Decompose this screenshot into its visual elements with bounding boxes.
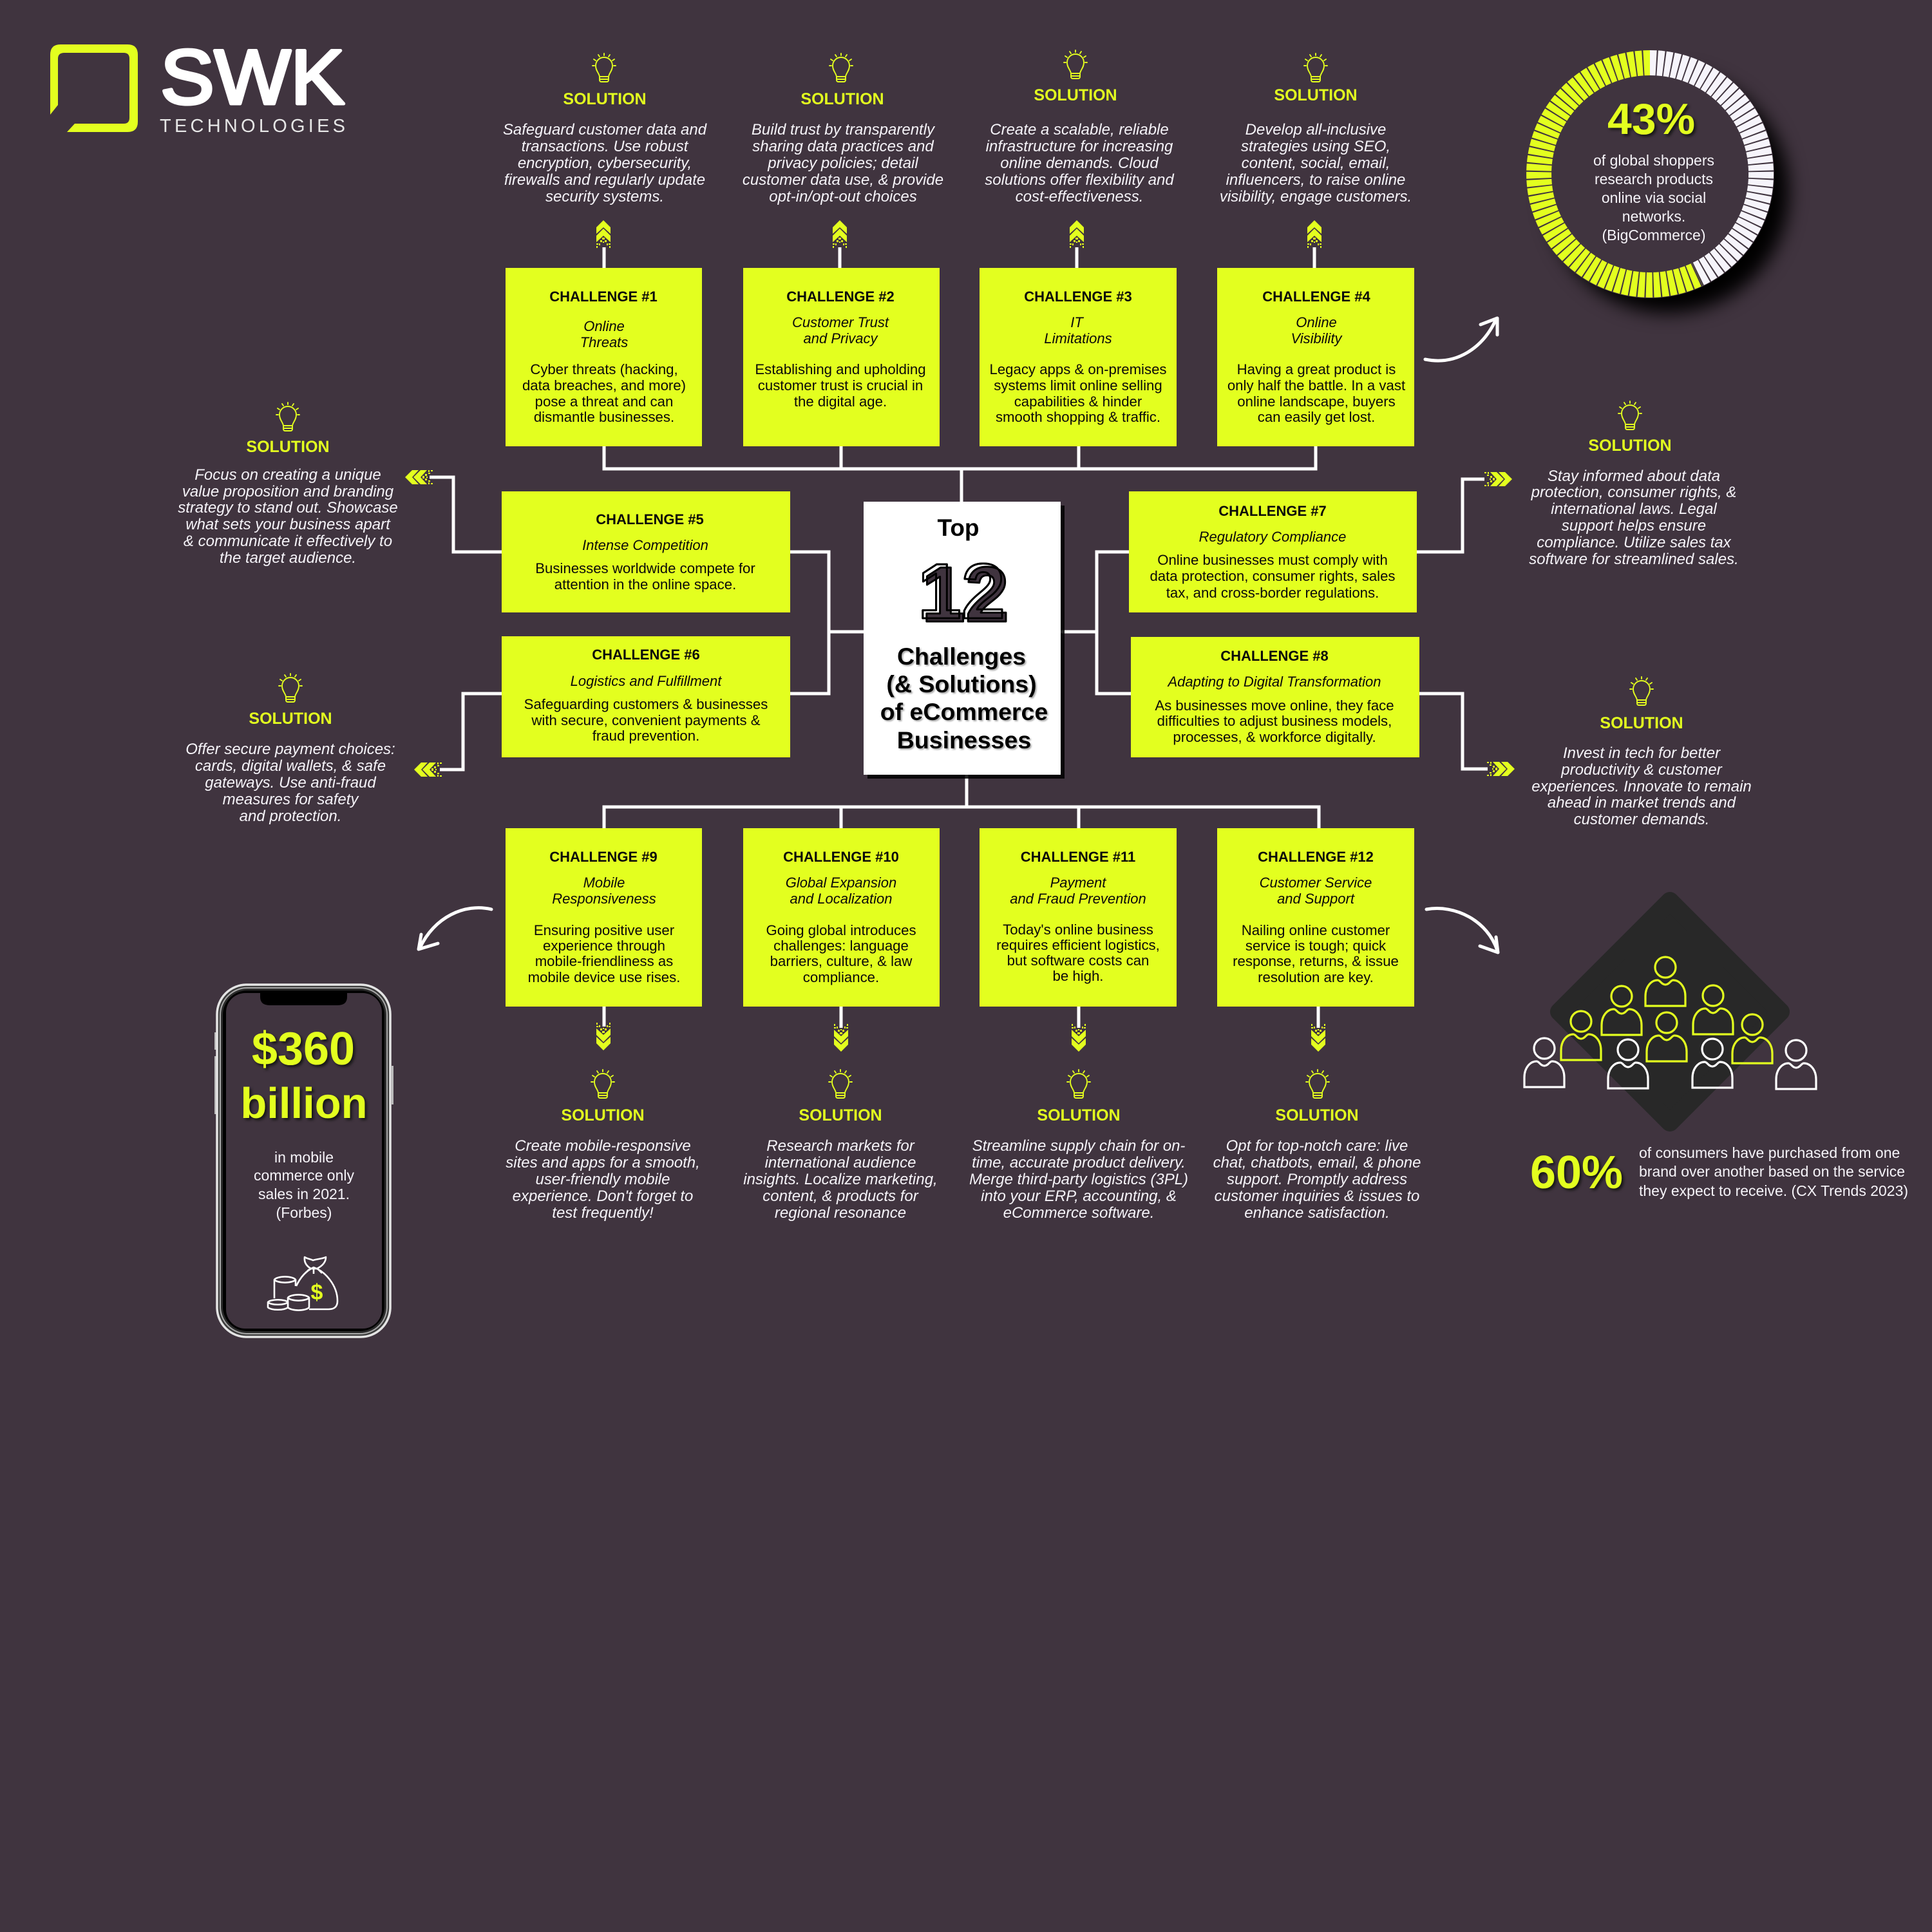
phone notch <box>260 993 347 1005</box>
donut white segments <box>1650 62 1761 274</box>
stat: people illustration <box>1524 901 1816 1122</box>
arrow: chevrons down 9 <box>596 1023 611 1050</box>
panel: challenge 9 <box>506 828 702 1007</box>
icon: light bulb <box>1304 53 1327 82</box>
challenge topic: Online <box>1296 314 1337 330</box>
panel: challenge 4 <box>1217 268 1414 446</box>
arrow: curved to people <box>1426 909 1498 952</box>
challenge description: fraud prevention. <box>592 728 699 744</box>
challenge description: data protection, consumer rights, sales <box>1150 568 1396 584</box>
solution text: protection, consumer rights, & <box>1531 484 1736 501</box>
solution text: regional resonance <box>775 1204 906 1222</box>
challenge description: customer trust is crucial in <box>758 377 923 393</box>
challenge description: Today's online business <box>1003 922 1153 938</box>
panel: challenge 8 <box>1131 637 1419 757</box>
panel: challenge 2 <box>743 268 940 446</box>
challenge topic: Intense Competition <box>582 537 708 553</box>
solution text: value proposition and branding <box>182 483 394 500</box>
solution text: software for streamlined sales. <box>1529 551 1739 568</box>
solution heading: SOLUTION <box>563 90 647 108</box>
phone side buttons <box>214 1032 393 1114</box>
challenge topic: Adapting to Digital Transformation <box>1167 674 1381 690</box>
challenge description: be high. <box>1053 968 1103 984</box>
solution text: experiences. Innovate to remain <box>1531 778 1752 795</box>
challenge heading: CHALLENGE #7 <box>1218 503 1327 519</box>
challenge description: data breaches, and more) <box>522 377 686 393</box>
solution text: sites and apps for a smooth, <box>506 1154 700 1171</box>
challenge description: processes, & workforce digitally. <box>1173 729 1376 745</box>
logo wordmark: SWK <box>160 34 345 120</box>
solution heading: SOLUTION <box>1275 1106 1359 1124</box>
challenge description: barriers, culture, & law <box>770 953 913 969</box>
icon: light bulb <box>1306 1070 1329 1098</box>
solution text: security systems. <box>545 188 664 205</box>
stat number: 43% <box>1607 95 1695 144</box>
solution 1 <box>503 53 707 205</box>
icon: money bag and coins <box>268 1257 337 1311</box>
heading: challenges and solutions <box>880 643 1048 753</box>
solution text: content, social, email, <box>1242 155 1390 172</box>
solution text: Focus on creating a unique <box>194 466 381 484</box>
solution text: visibility, engage customers. <box>1220 188 1412 205</box>
challenge heading: CHALLENGE #3 <box>1024 289 1132 305</box>
challenge description: mobile device use rises. <box>528 969 680 985</box>
solution text: influencers, to raise online <box>1226 171 1405 189</box>
solution 7 <box>1529 401 1739 568</box>
stat description: online via social <box>1602 189 1706 206</box>
logo subtitle: TECHNOLOGIES <box>160 116 345 137</box>
challenge description: but software costs can <box>1007 952 1149 969</box>
challenge description: Online businesses must comply with <box>1157 552 1388 568</box>
solution text: user-friendly mobile <box>536 1171 670 1188</box>
challenge topic: Limitations <box>1044 330 1112 346</box>
stat description: of global shoppers <box>1593 152 1714 169</box>
phone screen <box>226 993 382 1329</box>
panel: challenge 10 <box>743 828 940 1007</box>
panel: challenge 11 <box>980 828 1177 1007</box>
white people <box>1524 1038 1816 1089</box>
solution text: into your ERP, accounting, & <box>981 1188 1177 1205</box>
arrow: chevrons up 3 <box>1070 220 1084 248</box>
panel: challenge 7 <box>1129 491 1417 612</box>
challenge description: compliance. <box>803 969 879 985</box>
challenge heading: CHALLENGE #12 <box>1258 849 1374 865</box>
stat: phone with $360 billion <box>214 985 393 1337</box>
stat description: (Forbes) <box>276 1204 332 1221</box>
solution text: Research markets for <box>766 1137 915 1155</box>
stat: 60% of consumers <box>1530 1144 1908 1199</box>
solution text: Safeguard customer data and <box>503 121 707 138</box>
solution text: transactions. Use robust <box>522 138 689 155</box>
solution 10 <box>743 1070 938 1222</box>
solution text: Streamline supply chain for on- <box>972 1137 1185 1155</box>
solution text: customer inquiries & issues to <box>1215 1188 1419 1205</box>
arrow: chevrons down 11 <box>1072 1024 1086 1052</box>
challenge description: systems limit online selling <box>994 377 1162 393</box>
challenge topic: and Privacy <box>804 330 878 346</box>
donut shadow <box>1547 71 1789 313</box>
solution text: productivity & customer <box>1560 761 1723 779</box>
solution text: privacy policies; detail <box>767 155 918 172</box>
solution heading: SOLUTION <box>1037 1106 1121 1124</box>
solution text: Build trust by transparently <box>752 121 936 138</box>
challenge description: capabilities & hinder <box>1014 393 1142 410</box>
panel: challenge 5 <box>502 491 790 612</box>
solution heading: SOLUTION <box>799 1106 882 1124</box>
connector lines <box>430 247 1488 1028</box>
dark diamond <box>1559 901 1781 1122</box>
solution text: Create mobile-responsive <box>515 1137 691 1155</box>
challenge heading: CHALLENGE #5 <box>596 511 704 527</box>
solution text: what sets your business apart <box>185 516 391 533</box>
challenge topic: Mobile <box>583 875 625 891</box>
icon: light bulb <box>592 53 616 82</box>
arrow: chevrons left 5 <box>405 470 433 484</box>
solution text: support helps ensure <box>1562 517 1706 535</box>
challenge heading: CHALLENGE #8 <box>1220 648 1329 664</box>
solution text: and protection. <box>240 808 341 825</box>
icon: light bulb <box>276 402 299 431</box>
challenge description: Cyber threats (hacking, <box>530 361 678 377</box>
icon: light bulb <box>1618 401 1642 430</box>
stat description: networks. <box>1622 208 1685 225</box>
challenge description: pose a threat and can <box>535 393 673 410</box>
solution text: customer demands. <box>1574 811 1709 828</box>
icon: light bulb <box>1067 1070 1090 1098</box>
challenge description: As businesses move online, they face <box>1155 697 1394 714</box>
solution heading: SOLUTION <box>1588 437 1672 455</box>
solution text: infrastructure for increasing <box>986 138 1173 155</box>
heading: challenges and solutions: (& Solutions) <box>886 670 1037 697</box>
challenge topic: Logistics and Fulfillment <box>571 673 722 689</box>
challenge description: service is tough; quick <box>1245 938 1387 954</box>
solution text: gateways. Use anti-fraud <box>205 774 376 791</box>
arrow: curved to phone <box>419 908 491 949</box>
challenge description: challenges: language <box>773 938 909 954</box>
arrow: chevrons up 4 <box>1307 220 1321 248</box>
challenge heading: CHALLENGE #6 <box>592 647 700 663</box>
challenge heading: CHALLENGE #2 <box>786 289 895 305</box>
heading: challenges and solutions: Businesses <box>897 726 1031 753</box>
challenge description: Ensuring positive user <box>534 922 675 938</box>
stat description: (BigCommerce) <box>1602 227 1706 243</box>
stat number: billion <box>240 1079 368 1128</box>
solution text: support. Promptly address <box>1227 1171 1407 1188</box>
solution 4 <box>1220 53 1412 205</box>
challenge description: mobile-friendliness as <box>535 953 673 969</box>
stat number <box>240 1023 368 1128</box>
challenge description: the digital age. <box>794 393 887 410</box>
challenge description: resolution are key. <box>1258 969 1374 985</box>
challenge topic: Payment <box>1050 875 1106 891</box>
solution heading: SOLUTION <box>561 1106 645 1124</box>
stat description: of consumers have purchased from one <box>1639 1144 1900 1161</box>
challenge description: Legacy apps & on-premises <box>989 361 1167 377</box>
challenge topic: and Fraud Prevention <box>1010 891 1146 907</box>
challenge description: Nailing online customer <box>1242 922 1390 938</box>
big number 12: 12 <box>922 551 1009 638</box>
icon: light bulb <box>591 1070 614 1098</box>
arrow: curved to donut <box>1425 318 1497 361</box>
solution text: Invest in tech for better <box>1563 744 1721 762</box>
solution heading: SOLUTION <box>800 90 884 108</box>
challenge description: with secure, convenient payments & <box>531 712 761 728</box>
solution text: Offer secure payment choices: <box>185 741 395 758</box>
solution text: Opt for top-notch care: live <box>1226 1137 1408 1155</box>
stat description: in mobile <box>274 1149 334 1166</box>
logo mark <box>50 44 138 132</box>
challenge description: smooth shopping & traffic. <box>996 409 1160 425</box>
solution text: test frequently! <box>552 1204 654 1222</box>
stat description: commerce only <box>254 1167 354 1184</box>
big number 12: 12 <box>918 547 1005 635</box>
challenge heading: CHALLENGE #11 <box>1021 849 1135 865</box>
phone body <box>217 985 390 1337</box>
challenge topic: Threats <box>580 334 628 350</box>
solution text: enhance satisfaction. <box>1244 1204 1390 1222</box>
challenge description: difficulties to adjust business models, <box>1157 713 1392 729</box>
solution text: experience. Don't forget to <box>513 1188 693 1205</box>
solution text: cards, digital wallets, & safe <box>195 757 386 775</box>
challenge description: dismantle businesses. <box>534 409 674 425</box>
solution 2 <box>743 53 943 205</box>
solution heading: SOLUTION <box>249 710 332 728</box>
icon: light bulb <box>279 674 302 702</box>
challenge description: online landscape, buyers <box>1237 393 1396 410</box>
solution 12 <box>1213 1070 1421 1222</box>
arrow: chevrons up 1 <box>596 220 611 248</box>
solution text: online demands. Cloud <box>1000 155 1159 172</box>
solution heading: SOLUTION <box>1600 714 1683 732</box>
challenge description: requires efficient logistics, <box>996 937 1160 953</box>
challenge description: attention in the online space. <box>554 576 736 592</box>
solution heading: SOLUTION <box>246 438 330 456</box>
challenge topic: Visibility <box>1291 330 1343 346</box>
arrow: chevrons down 12 <box>1311 1024 1325 1052</box>
solution text: strategies using SEO, <box>1241 138 1390 155</box>
solution 5 <box>178 402 398 567</box>
arrow: chevrons up 2 <box>833 220 847 248</box>
arrow: chevrons left 6 <box>414 762 442 777</box>
solution text: encryption, cybersecurity, <box>518 155 692 172</box>
solution text: chat, chatbots, email, & phone <box>1213 1154 1421 1171</box>
stat description: research products <box>1595 171 1713 187</box>
big number 12: 12 <box>918 547 1005 635</box>
solution text: firewalls and regularly update <box>504 171 705 189</box>
solution text: Develop all-inclusive <box>1245 121 1386 138</box>
solution 3 <box>985 50 1174 205</box>
challenge description: experience through <box>543 938 665 954</box>
challenge description: Going global introduces <box>766 922 916 938</box>
solution text: opt-in/opt-out choices <box>769 188 917 205</box>
challenge description: Establishing and upholding <box>755 361 926 377</box>
solution 6 <box>185 674 395 825</box>
arrow: chevrons right 7 <box>1484 472 1512 486</box>
solution 8 <box>1531 677 1752 828</box>
solution heading: SOLUTION <box>1274 86 1358 104</box>
solution text: international audience <box>765 1154 916 1171</box>
solution text: strategy to stand out. Showcase <box>178 499 398 516</box>
challenge description: response, returns, & issue <box>1233 953 1399 969</box>
challenge topic: Customer Trust <box>792 314 889 330</box>
donut lime segments <box>1539 63 1698 285</box>
panel: central title card <box>864 502 1065 779</box>
stat: 43% donut <box>1526 50 1789 313</box>
panel: challenge 12 <box>1217 828 1414 1007</box>
challenge description: Safeguarding customers & businesses <box>524 696 768 712</box>
solution heading: SOLUTION <box>1034 86 1117 104</box>
solution text: cost-effectiveness. <box>1016 188 1143 205</box>
solution text: & communicate it effectively to <box>184 533 392 550</box>
solution text: sharing data practices and <box>752 138 934 155</box>
challenge topic: IT <box>1070 314 1084 330</box>
challenge topic: Regulatory Compliance <box>1199 529 1346 545</box>
challenge topic: Global Expansion <box>786 875 896 891</box>
solution text: Merge third-party logistics (3PL) <box>969 1171 1188 1188</box>
challenge description: Having a great product is <box>1237 361 1396 377</box>
challenge description: tax, and cross-border regulations. <box>1166 585 1379 601</box>
heading: Top: Top <box>937 515 980 541</box>
challenge description: only half the battle. In a vast <box>1227 377 1405 393</box>
solution text: the target audience. <box>220 549 356 567</box>
solution text: time, accurate product delivery. <box>972 1154 1186 1171</box>
stat description: they expect to receive. (CX Trends 2023) <box>1639 1182 1908 1199</box>
challenge heading: CHALLENGE #10 <box>783 849 899 865</box>
panel: challenge 3 <box>980 268 1177 446</box>
arrow: chevrons down 10 <box>834 1024 848 1052</box>
solution text: solutions offer flexibility and <box>985 171 1174 189</box>
solution text: Create a scalable, reliable <box>990 121 1169 138</box>
challenge heading: CHALLENGE #4 <box>1262 289 1370 305</box>
icon: money bag and coins: $ <box>311 1280 323 1305</box>
heading: challenges and solutions: of eCommerce <box>880 698 1048 725</box>
solution text: customer data use, & provide <box>743 171 943 189</box>
lime people <box>1561 957 1772 1063</box>
panel: challenge 6 <box>502 636 790 757</box>
challenge topic: and Localization <box>790 891 893 907</box>
challenge description: Businesses worldwide compete for <box>535 560 755 576</box>
solution text: international laws. Legal <box>1551 500 1717 518</box>
solution 11 <box>969 1070 1188 1222</box>
icon: light bulb <box>829 1070 852 1098</box>
challenge topic: Online <box>583 318 625 334</box>
icon: light bulb <box>829 53 853 82</box>
challenge topic: Customer Service <box>1260 875 1372 891</box>
solution text: Stay informed about data <box>1548 468 1720 485</box>
challenge description: can easily get lost. <box>1258 409 1375 425</box>
logo: SWK Technologies <box>50 34 345 137</box>
solution 9 <box>506 1070 700 1222</box>
stat number: 60% <box>1530 1147 1623 1198</box>
icon: light bulb <box>1630 677 1653 705</box>
solution text: insights. Localize marketing, <box>743 1171 938 1188</box>
solution text: measures for safety <box>223 791 359 808</box>
heading: challenges and solutions: Challenges <box>897 643 1026 670</box>
solution text: eCommerce software. <box>1003 1204 1154 1222</box>
stat number: $360 <box>252 1023 355 1075</box>
solution text: compliance. Utilize sales tax <box>1537 534 1732 551</box>
arrow: chevrons right 8 <box>1487 762 1515 776</box>
challenge heading: CHALLENGE #9 <box>549 849 658 865</box>
solution text: content, & products for <box>762 1188 919 1205</box>
stat description: brand over another based on the service <box>1639 1163 1905 1180</box>
icon: light bulb <box>1064 50 1087 79</box>
challenge heading: CHALLENGE #1 <box>549 289 658 305</box>
solution text: ahead in market trends and <box>1548 794 1736 811</box>
stat description: sales in 2021. <box>258 1186 350 1202</box>
challenge topic: Responsiveness <box>552 891 656 907</box>
challenge topic: and Support <box>1277 891 1355 907</box>
panel: challenge 1 <box>506 268 702 446</box>
